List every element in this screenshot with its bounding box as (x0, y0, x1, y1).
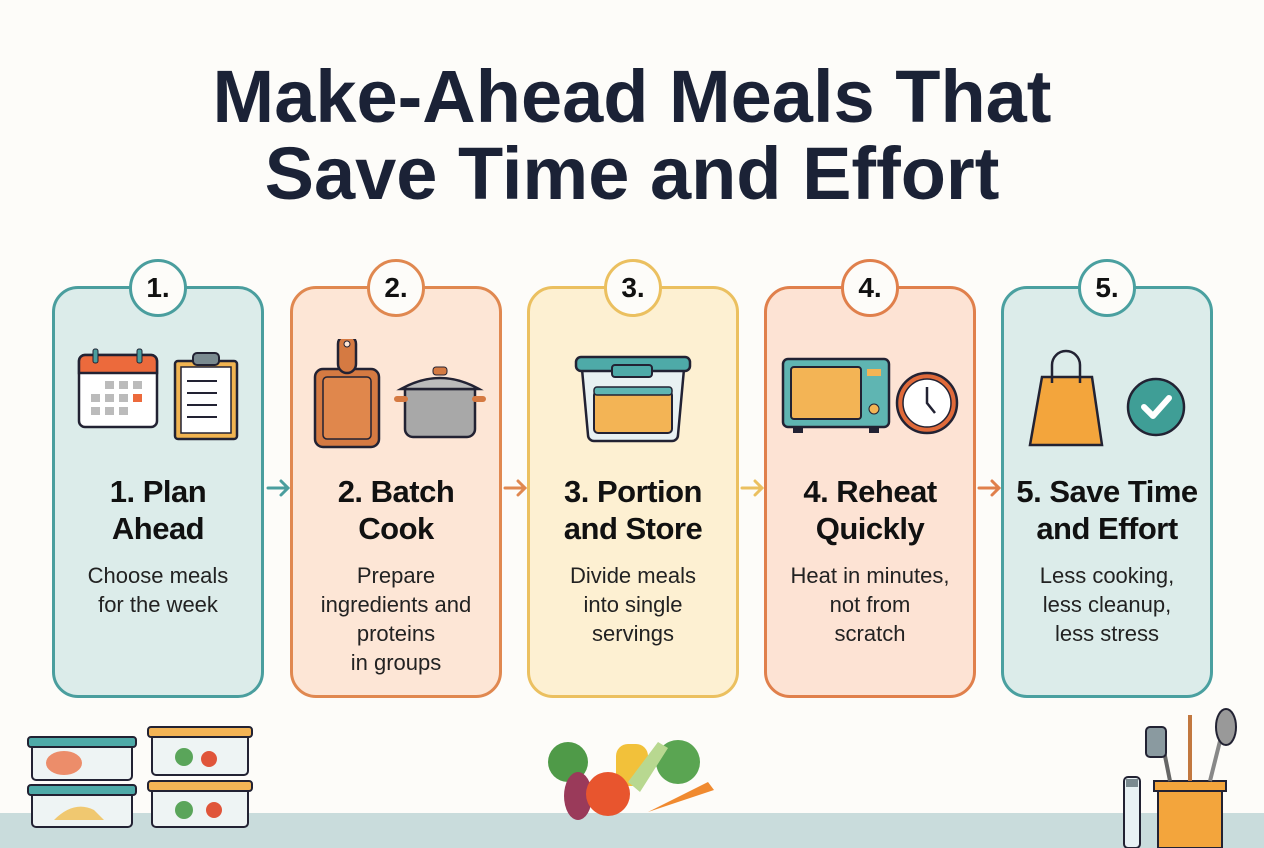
body text: into single (583, 592, 683, 617)
heading: Ahead (112, 511, 204, 546)
body text (570, 563, 696, 646)
icon: bag and check (1028, 350, 1186, 446)
panel: save time and effort (1001, 286, 1213, 698)
body text: for the week (98, 592, 218, 617)
body text: Less cooking, (1040, 563, 1174, 588)
badge 5 (1078, 259, 1136, 317)
body text (1040, 563, 1174, 646)
heading: Quickly (816, 511, 924, 546)
arrow 2 (504, 479, 527, 497)
body text: proteins (357, 621, 435, 646)
heading: 2. Batch (338, 474, 454, 509)
illustration: utensils (1123, 708, 1237, 848)
body text: Heat in minutes, (791, 563, 949, 588)
heading: 4. Reheat (803, 474, 937, 509)
icon: microwave and clock (782, 358, 958, 434)
heading: and Effort (1036, 511, 1178, 546)
illustration: meal prep containers (27, 726, 253, 828)
heading: 5. Save Time (1016, 474, 1198, 509)
heading: 3. Portion (564, 474, 702, 509)
icon: container (574, 356, 692, 442)
title: Make-Ahead Meals That (213, 55, 1051, 138)
panel: batch cook (290, 286, 502, 698)
body text (321, 563, 471, 675)
body text: less cleanup, (1043, 592, 1171, 617)
badge 3 (604, 259, 662, 317)
badge 1: 1. (146, 272, 170, 303)
counter (0, 813, 1264, 848)
body text (791, 563, 949, 646)
body text: Prepare (357, 563, 435, 588)
heading (1016, 474, 1198, 546)
panel: plan ahead (52, 286, 264, 698)
body text: Divide meals (570, 563, 696, 588)
illustration: vegetables (548, 740, 714, 820)
arrow 4 (978, 479, 1001, 497)
body text: scratch (835, 621, 905, 646)
body text (88, 563, 228, 617)
badge 3: 3. (621, 272, 645, 303)
heading: Cook (358, 511, 434, 546)
badge 2: 2. (384, 272, 408, 303)
heading (803, 474, 937, 546)
title: Save Time and Effort (265, 132, 999, 215)
icon: calendar and clipboard (78, 348, 238, 440)
body text: in groups (351, 650, 441, 675)
heading (338, 474, 454, 546)
heading (564, 474, 702, 546)
arrow 3 (740, 479, 764, 497)
badge 1 (129, 259, 187, 317)
panel: portion and store (527, 286, 739, 698)
body text: not from (830, 592, 910, 617)
badge 4 (841, 259, 899, 317)
body text: servings (592, 621, 674, 646)
heading: and Store (564, 511, 702, 546)
body text: less stress (1055, 621, 1159, 646)
panel: reheat quickly (764, 286, 976, 698)
badge 2 (367, 259, 425, 317)
body text: ingredients and (321, 592, 471, 617)
heading: 1. Plan (110, 474, 206, 509)
arrow 1 (266, 479, 290, 497)
badge 5: 5. (1095, 272, 1119, 303)
title (213, 55, 1051, 215)
body text: Choose meals (88, 563, 228, 588)
heading (110, 474, 206, 546)
icon: board and pot (314, 339, 486, 448)
badge 4: 4. (858, 272, 882, 303)
